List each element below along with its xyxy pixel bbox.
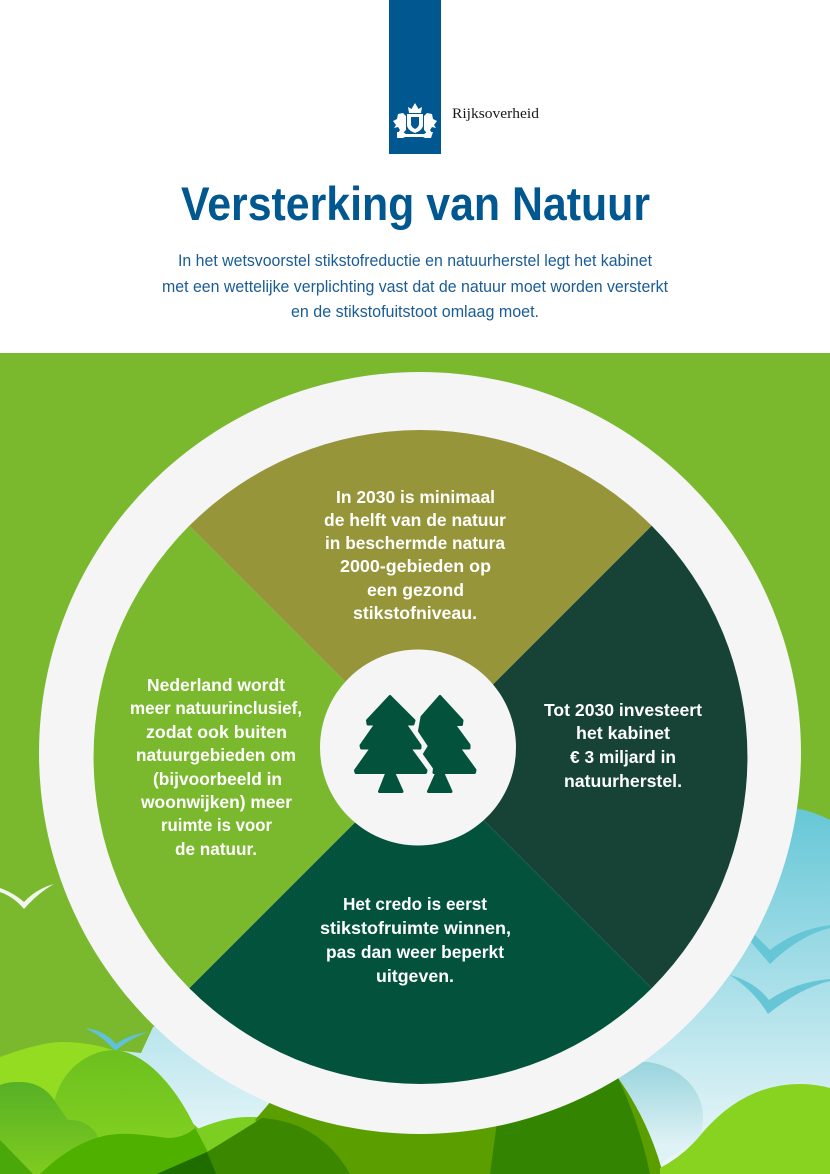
text: left wedge: de natuur. (175, 839, 257, 859)
hill: sliver (618, 1078, 662, 1174)
text: right wedge: natuurherstel. (564, 771, 682, 791)
hill: bright (0, 1042, 150, 1174)
text: left wedge: Nederland wordt (147, 675, 285, 695)
cloud (600, 1062, 703, 1174)
logo: Rijksoverheid (389, 0, 540, 154)
intro text: met een wettelijke verplichting vast dat de natuur moet worden versterkt (162, 278, 668, 296)
bird: blue left (85, 1028, 149, 1051)
text: top wedge: stikstofniveau. (353, 603, 477, 623)
bird: teal upper (745, 925, 830, 964)
panel: left wedge (94, 526, 420, 988)
hill: right bright (660, 1084, 830, 1174)
text: bottom wedge: pas dan weer beperkt (326, 942, 504, 962)
outer ring (39, 372, 801, 1134)
hill: left blob (0, 1082, 101, 1174)
text: right wedge: het kabinet (576, 723, 670, 743)
text: bottom wedge (320, 894, 511, 986)
hill: dark overlap (157, 1152, 216, 1174)
hill: dark centre (157, 1118, 350, 1174)
text: left wedge: natuurgebieden om (136, 745, 296, 765)
panel: bottom wedge (189, 757, 652, 1084)
text: left wedge (130, 675, 302, 859)
text: right wedge: Tot 2030 investeert (544, 700, 702, 720)
text: bottom wedge: uitgeven. (376, 966, 454, 986)
text: left wedge: meer natuurinclusief, (130, 698, 302, 718)
text: left wedge: (bijvoorbeeld in (153, 769, 282, 789)
intro text: In het wetsvoorstel stikstofreductie en natuurherstel legt het kabinet (178, 252, 652, 270)
panel: wheel (94, 430, 747, 1084)
panel: landscape background (0, 353, 830, 1174)
text: top wedge (324, 487, 506, 623)
text: right wedge (544, 700, 702, 791)
panel: top wedge (189, 430, 652, 757)
text: top wedge: 2000-gebieden op (340, 556, 491, 576)
hill: central olive (255, 1100, 505, 1174)
text: top wedge: de helft van de natuur (324, 510, 506, 530)
text: bottom wedge: stikstofruimte winnen, (320, 918, 511, 938)
text: top wedge: in beschermde natura (325, 533, 505, 553)
bird: teal lower (730, 975, 830, 1014)
centre circle (320, 650, 516, 846)
sky (113, 808, 830, 1174)
icon: two trees (356, 696, 475, 792)
intro text (162, 252, 668, 321)
text: bottom wedge: Het credo is eerst (343, 894, 487, 914)
title: Versterking van Natuur (181, 177, 650, 230)
hill: medium (53, 1050, 217, 1174)
text: top wedge: In 2030 is minimaal (336, 487, 495, 507)
panel: right wedge (420, 526, 747, 988)
icon: coat of arms (393, 103, 437, 138)
hill: dark right (490, 1078, 650, 1174)
intro text: en de stikstofuitstoot omlaag moet. (291, 303, 539, 321)
text: right wedge: € 3 miljard in (570, 747, 676, 767)
text: left wedge: woonwijken) meer (140, 792, 292, 812)
hill: bright green front (40, 1128, 217, 1174)
hill: light middle (190, 1117, 300, 1174)
logo wordmark: Rijksoverheid (452, 106, 540, 122)
bird: white (0, 884, 54, 909)
green background (0, 353, 830, 1174)
logo bar (389, 0, 441, 154)
hill: left corner (0, 1140, 33, 1174)
text: top wedge: een gezond (367, 580, 464, 600)
text: left wedge: ruimte is voor (161, 815, 272, 835)
text: left wedge: zodat ook buiten (146, 722, 287, 742)
